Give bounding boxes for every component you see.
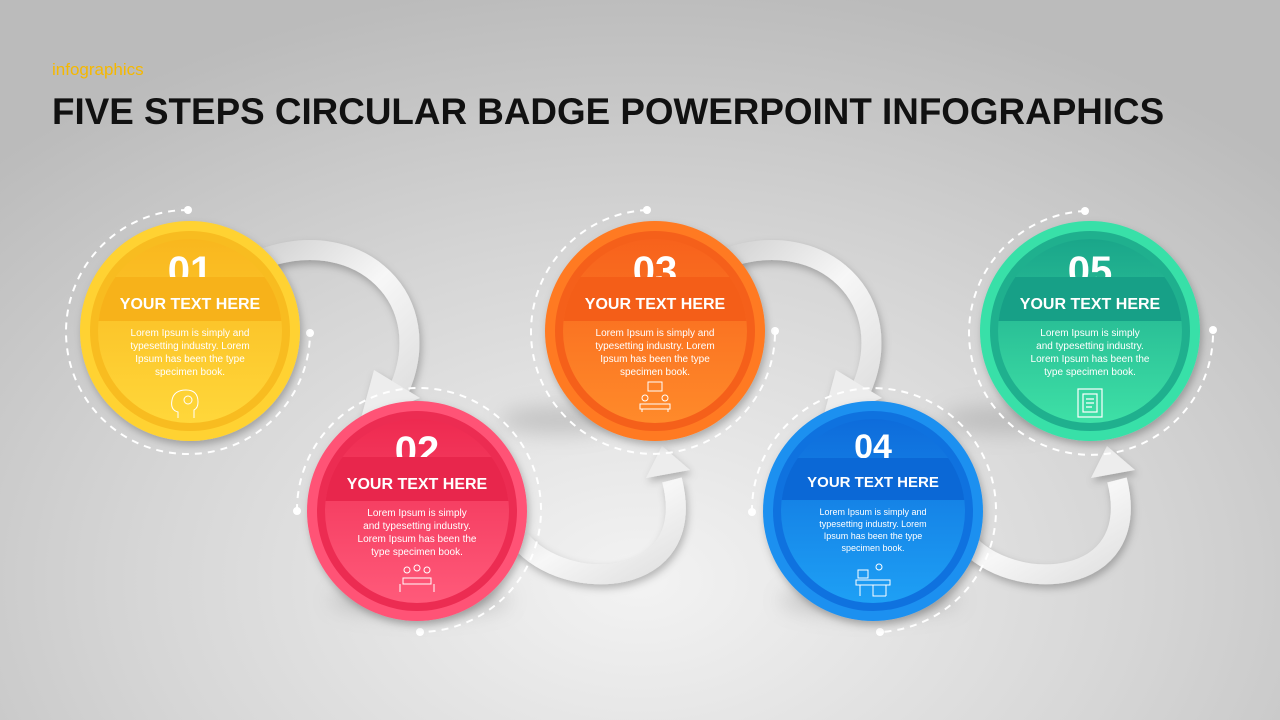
badge 03: [531, 206, 779, 454]
arrow: 04 to 05: [965, 446, 1135, 574]
badge 03: specimen book.: [620, 367, 690, 378]
badge 05: Lorem Ipsum is simply: [1040, 328, 1140, 339]
dashed arc 04: [752, 388, 996, 632]
subtitle: infographics: [52, 60, 144, 79]
badge 04: 04: [854, 428, 892, 466]
title: FIVE STEPS CIRCULAR BADGE POWERPOINT INFOGRAPHICS: [52, 91, 1164, 132]
badge 03: Lorem Ipsum is simply and: [596, 328, 714, 339]
badge 03: 03: [633, 249, 677, 293]
dashed arc 03: [531, 210, 775, 454]
badge 01: 01: [168, 249, 212, 293]
badge 02: YOUR TEXT HERE: [347, 476, 488, 493]
badge 03: typesetting industry. Lorem: [595, 341, 715, 352]
badge 01: typesetting industry. Lorem: [130, 341, 250, 352]
badge 02: [293, 388, 541, 636]
badge 01: YOUR TEXT HERE: [120, 296, 261, 313]
badge 05: YOUR TEXT HERE: [1020, 296, 1161, 313]
badge 05: type specimen book.: [1044, 367, 1136, 378]
badge 05: 05: [1068, 249, 1112, 293]
icon: desk worker: [856, 564, 890, 596]
dashed arc 02: [297, 388, 541, 632]
badge 05: Lorem Ipsum has been the: [1031, 354, 1150, 365]
badge 04: typesetting industry. Lorem: [819, 519, 927, 529]
badge 02: Lorem Ipsum has been the: [358, 534, 477, 545]
badge 04: [748, 388, 996, 636]
badge 02: 02: [395, 429, 439, 473]
badge 04: YOUR TEXT HERE: [807, 474, 939, 491]
icon: clipboard: [1078, 389, 1102, 417]
badge 01: specimen book.: [155, 367, 225, 378]
badge 01: Ipsum has been the type: [135, 354, 245, 365]
icon: meeting: [400, 565, 434, 592]
badge 02: type specimen book.: [371, 547, 463, 558]
badge 04: Lorem Ipsum is simply and: [819, 507, 927, 517]
badge 04: specimen book.: [841, 543, 905, 553]
dashed arc 01: [66, 210, 310, 454]
badge 02: Lorem Ipsum is simply: [367, 508, 467, 519]
icon: head gear: [172, 390, 198, 418]
badge 04: Ipsum has been the type: [824, 531, 922, 541]
badge 05: and typesetting industry.: [1036, 341, 1144, 352]
badge 01: Lorem Ipsum is simply and: [131, 328, 249, 339]
badge 01: [66, 206, 314, 454]
shadows: [330, 406, 1060, 616]
dashed arc 05: [969, 211, 1213, 455]
arrow: 02 to 03: [520, 446, 690, 574]
badge 05: [969, 207, 1217, 455]
icon: discussion: [640, 382, 670, 412]
badge 02: and typesetting industry.: [363, 521, 471, 532]
arrow: 01 to 02: [265, 250, 420, 422]
arrow: 03 to 04: [727, 250, 882, 422]
badge 03: Ipsum has been the type: [600, 354, 710, 365]
badge 03: YOUR TEXT HERE: [585, 296, 726, 313]
